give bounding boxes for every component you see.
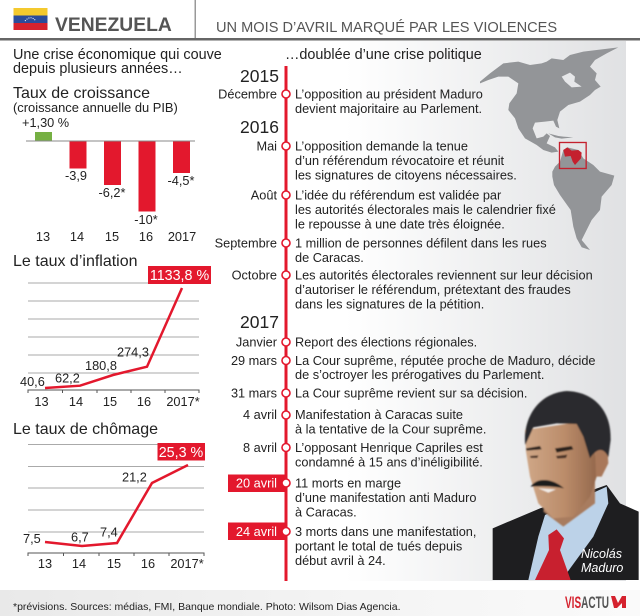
intro text: economy: depuis plusieurs années… — [13, 61, 183, 77]
timeline: La Cour suprême, réputée proche de Maduro, décide — [295, 353, 596, 368]
line chart: unemployment: 2017* — [170, 556, 204, 571]
line chart: inflation: 16 — [137, 394, 151, 409]
highlighted date: 24 avril — [228, 522, 286, 540]
line chart: inflation: 14 — [69, 394, 83, 409]
timeline: 29 mars — [231, 353, 277, 368]
timeline: 20 avril — [236, 476, 277, 490]
timeline: dans les signatures de la pétition. — [295, 296, 484, 312]
timeline: Septembre — [215, 236, 277, 250]
line chart: unemployment: 13 — [38, 556, 52, 571]
timeline: L’opposant Henrique Capriles est — [295, 440, 483, 455]
timeline: les autorités électorales mais le calendrier fixé — [295, 202, 556, 217]
line chart: inflation: 13 — [34, 394, 49, 409]
subheading: (croissance annuelle du PIB) — [13, 100, 178, 115]
photo caption: Maduro — [581, 561, 623, 575]
timeline: condamné à 15 ans d’inéligibilité. — [295, 454, 483, 470]
panel: right background — [225, 41, 626, 581]
bar chart: Taux de croissance — [13, 85, 196, 244]
timeline: les signatures de citoyens nécessaires. — [295, 168, 517, 182]
bar chart: Taux de croissance: 16 — [139, 229, 153, 244]
line chart: unemployment: 6,7 — [71, 530, 89, 545]
timeline: le repousse à une date très éloignée. — [295, 216, 505, 232]
callout: 1133,8 %: 1133,8 % — [150, 268, 209, 284]
bar chart: Taux de croissance: -3,9 — [65, 168, 87, 183]
header — [0, 0, 640, 40]
year 2016: 2016 — [240, 117, 279, 137]
line chart: inflation: 180,8 — [85, 358, 117, 373]
bar chart: Taux de croissance: -10* — [134, 212, 158, 227]
timeline: Décembre — [218, 86, 277, 102]
bar chart: Taux de croissance: -4,5* — [168, 173, 195, 188]
bar chart: Taux de croissance: +1,30 % — [22, 115, 69, 130]
timeline: Mai — [256, 138, 277, 154]
heading: Le taux d’inflation — [13, 253, 138, 270]
portrait: Nicolás Maduro — [493, 391, 639, 580]
timeline: 3 morts dans une manifestation, — [295, 524, 476, 539]
timeline: devient majoritaire au Parlement. — [295, 101, 482, 116]
timeline — [215, 66, 596, 581]
bar chart: Taux de croissance: 15 — [105, 229, 119, 244]
timeline: 11 morts en marge — [295, 476, 401, 490]
timeline: 24 avril — [236, 524, 277, 539]
photo caption: Nicolás — [581, 547, 622, 561]
logo: VISACTU: VISACTU — [565, 593, 609, 612]
line chart: inflation: 2017* — [166, 394, 200, 409]
timeline: 31 mars — [231, 386, 277, 400]
timeline: 4 avril — [243, 407, 277, 422]
timeline: Report des élections régionales. — [295, 334, 477, 350]
timeline: L’opposition au président Maduro — [295, 86, 483, 102]
footer sources: *prévisions. Sources: médias, FMI, Banque mondiale. Photo: Wilsom Dias Agencia. — [13, 601, 401, 613]
timeline: L’idée du référendum est validée par — [295, 188, 502, 202]
line chart: inflation — [13, 253, 211, 409]
line chart: unemployment: 15 — [107, 556, 121, 571]
line chart: unemployment: 16 — [141, 556, 155, 571]
icon: Venezuelan flag — [14, 8, 48, 30]
footer band — [0, 590, 640, 616]
timeline: 1 million de personnes défilent dans les rues — [295, 236, 547, 250]
year 2017: 2017 — [240, 312, 279, 332]
subtitle: UN MOIS D’AVRIL MARQUÉ PAR LES VIOLENCES — [216, 19, 557, 36]
bar chart: Taux de croissance: -6,2* — [99, 185, 126, 200]
line chart: inflation: 62,2 — [55, 370, 80, 386]
timeline: d’une manifestation anti Maduro — [295, 490, 476, 505]
timeline: de Caracas. — [295, 250, 364, 265]
callout: 25,3 %: 25,3 % — [159, 445, 204, 461]
timeline: à la tentative de la Cour suprême. — [295, 422, 486, 436]
timeline: de s’octroyer les prérogatives du Parlement. — [295, 367, 544, 382]
timeline: portant le total de tués depuis — [295, 538, 462, 554]
timeline: L’opposition demande la tenue — [295, 138, 468, 154]
line chart: inflation: 40,6 — [20, 374, 45, 389]
timeline: Octobre — [232, 268, 277, 282]
line chart: unemployment: 7,5 — [23, 531, 41, 546]
timeline: La Cour suprême revient sur sa décision. — [295, 386, 527, 400]
timeline: Manifestation à Caracas suite — [295, 407, 463, 422]
map of the Americas — [480, 47, 618, 250]
line chart: unemployment: 14 — [72, 556, 86, 571]
timeline: d’un référendum révocatoire et réunit — [295, 153, 505, 168]
heading: Le taux de chômage — [13, 421, 158, 438]
heading: Taux de croissance — [13, 85, 150, 102]
year 2015: 2015 — [240, 66, 279, 86]
intro text: economy: Une crise économique qui couve — [13, 47, 222, 63]
bar chart: Taux de croissance: 13 — [36, 229, 50, 244]
intro text: politics: …doublée d’une crise politique — [285, 47, 482, 63]
bar chart: Taux de croissance: 14 — [70, 229, 84, 244]
timeline: d’autoriser le référendum, prétextant des fraudes — [295, 282, 571, 297]
line chart: unemployment: 7,4 — [100, 525, 118, 540]
bar chart: Taux de croissance: 2017 — [168, 229, 196, 244]
timeline: Août — [251, 188, 277, 202]
timeline: à Caracas. — [295, 504, 357, 520]
timeline: 8 avril — [243, 440, 277, 455]
title: VENEZUELA — [55, 15, 172, 36]
highlighted date: 20 avril — [228, 474, 286, 492]
line chart: inflation: 274,3 — [117, 345, 149, 360]
line chart: inflation: 15 — [103, 394, 117, 409]
timeline: Janvier — [236, 334, 278, 350]
line chart: unemployment: 21,2 — [122, 470, 147, 485]
timeline: début avril à 24. — [295, 553, 386, 568]
line chart: unemployment — [13, 421, 205, 571]
timeline: Les autorités électorales reviennent sur leur décision — [295, 268, 593, 282]
